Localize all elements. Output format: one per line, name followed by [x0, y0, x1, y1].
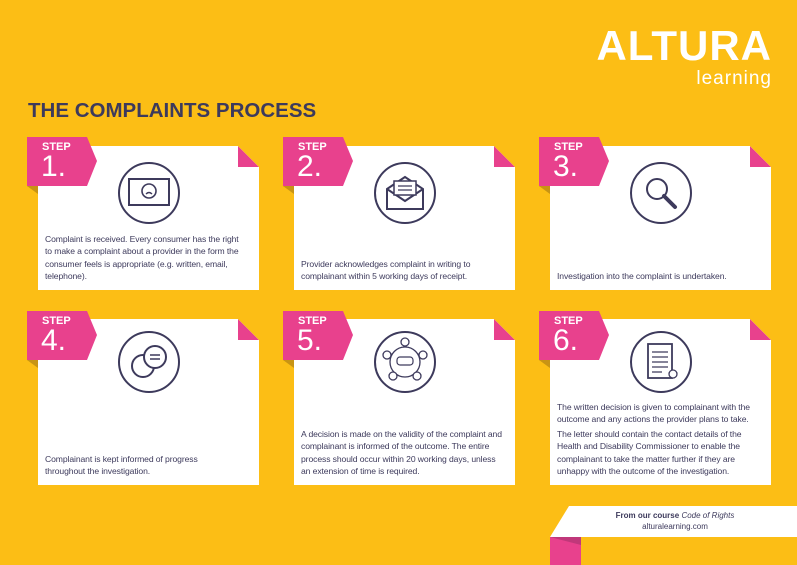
- tab 4: [27, 311, 97, 368]
- card 6: [550, 319, 771, 485]
- icon: envelope: [374, 162, 436, 224]
- footer text: From our course Code of Rights: [616, 511, 734, 520]
- icon: chat bubbles: [118, 331, 180, 393]
- footer text: [616, 511, 734, 531]
- text: step 3: Investigation into the complaint is undertaken.: [557, 271, 727, 281]
- tab 1: [27, 137, 97, 194]
- text: step 1: Complaint is received. Every consumer has the right to make a complaint about a provider in the form the consumer feels is appropriate (e.g. written, email, telephone).: [45, 234, 239, 281]
- text: step 4: Complainant is kept informed of progress throughout the investigation.: [45, 454, 198, 476]
- icon: complaint speech bubble: [118, 162, 180, 224]
- icon: document: [630, 331, 692, 393]
- footer band: [550, 506, 797, 565]
- tab 4: 4.: [41, 324, 66, 357]
- tab 1: 1.: [41, 150, 66, 183]
- icon: magnifier: [630, 162, 692, 224]
- tab 6: [539, 311, 609, 368]
- card 2: [294, 146, 515, 290]
- card 3: [550, 146, 771, 290]
- logo: ALTURA: [596, 22, 772, 69]
- tab 4: STEP: [42, 315, 71, 327]
- text: step 2: Provider acknowledges complaint in writing to complainant within 5 working days of receipt.: [301, 259, 470, 281]
- footer text: alturalearning.com: [642, 522, 708, 531]
- tab 5: [283, 311, 353, 368]
- tab 3: 3.: [553, 150, 578, 183]
- icon: meeting: [374, 331, 436, 393]
- card 1: [38, 146, 259, 290]
- card 5: [294, 319, 515, 485]
- logo: learning: [696, 68, 772, 89]
- tab 2: [283, 137, 353, 194]
- tab 3: STEP: [554, 141, 583, 153]
- card 4: [38, 319, 259, 485]
- tab 3: [539, 137, 609, 194]
- tab 6: 6.: [553, 324, 578, 357]
- text: step 6: The written decision is given to complainant with the outcome and any actions the provider plans to take. The letter should contain the contact details of the Health and Disability Commissioner to enable the complainant to take the matter further if they are unhappy with the outcome of the investigation.: [557, 402, 750, 476]
- tab 2: STEP: [298, 141, 327, 153]
- tab 5: STEP: [298, 315, 327, 327]
- tab 2: 2.: [297, 150, 322, 183]
- tab 1: STEP: [42, 141, 71, 153]
- tab 5: 5.: [297, 324, 322, 357]
- tab 6: STEP: [554, 315, 583, 327]
- title: THE COMPLAINTS PROCESS: [28, 99, 316, 122]
- text: step 5: A decision is made on the validity of the complaint and complainant is informed of the outcome. The entire process should occur within 20 working days, unless an extension of time is required.: [301, 429, 502, 476]
